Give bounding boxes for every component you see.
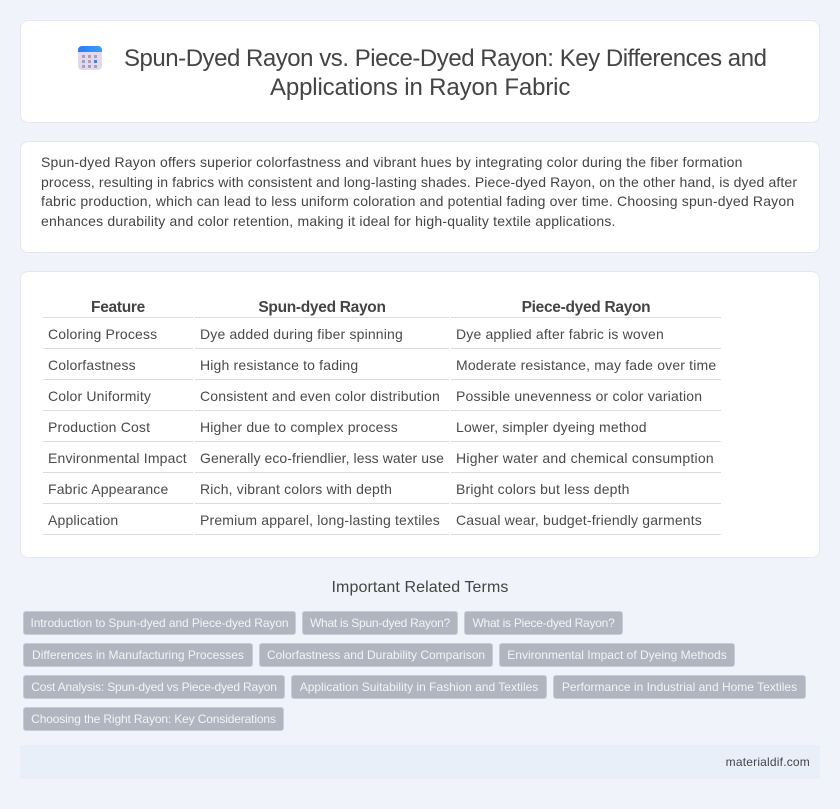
panel: description <box>20 141 820 253</box>
row: Coloring Process: Coloring Process <box>48 326 157 342</box>
row: Application: Casual wear, budget-friendly garments <box>456 512 702 528</box>
row: Coloring Process: Dye applied after fabric is woven <box>456 326 664 342</box>
tag: What is Spun-dyed Rayon? <box>310 616 450 630</box>
row: Application: Application <box>48 512 118 528</box>
row: Production Cost <box>48 419 647 435</box>
row: Color Uniformity: Consistent and even color distribution <box>200 388 440 404</box>
text block: description: enhances durability and color retention, making it ideal for high-quality textile applications. <box>41 213 616 229</box>
tag <box>23 707 284 731</box>
tag: Cost Analysis: Spun-dyed vs Piece-dyed Rayon <box>31 680 277 694</box>
panel: title header <box>20 20 820 123</box>
row: Color Uniformity: Color Uniformity <box>48 388 151 404</box>
tag <box>302 611 458 635</box>
tag: Performance in Industrial and Home Textiles <box>562 680 797 694</box>
row: Environmental Impact <box>48 450 714 466</box>
row: Colorfastness: Colorfastness <box>48 357 136 373</box>
tag <box>23 643 253 667</box>
row: Environmental Impact: Generally eco-friendlier, less water use <box>200 450 444 466</box>
tag: Differences in Manufacturing Processes <box>32 648 244 662</box>
row: Color Uniformity <box>48 388 702 404</box>
tag <box>23 675 285 699</box>
row: Production Cost: Higher due to complex process <box>200 419 398 435</box>
text block: description: fabric production, which can lead to less uniform coloration and potential fading over time. Choosing spun-dyed Rayon <box>41 193 794 209</box>
row: Environmental Impact: Environmental Impact <box>48 450 187 466</box>
row: Colorfastness: Moderate resistance, may fade over time <box>456 357 716 373</box>
tag: Application Suitability in Fashion and Textiles <box>300 680 538 694</box>
icon: calendar <box>78 46 102 70</box>
panel: comparison table <box>20 271 820 558</box>
text block: description <box>41 154 797 229</box>
row: Production Cost: Lower, simpler dyeing method <box>456 419 647 435</box>
title: Applications in Rayon Fabric <box>270 74 570 101</box>
title <box>124 45 766 101</box>
table header: Spun-dyed Rayon: Spun-dyed Rayon <box>258 299 386 316</box>
row: Fabric Appearance: Fabric Appearance <box>48 481 168 497</box>
tag <box>464 611 623 635</box>
tag: Environmental Impact of Dyeing Methods <box>507 648 727 662</box>
row: Application: Premium apparel, long-lasting textiles <box>200 512 440 528</box>
row: Color Uniformity: Possible unevenness or color variation <box>456 388 702 404</box>
row: Colorfastness: High resistance to fading <box>200 357 358 373</box>
tag <box>23 611 296 635</box>
row: Application <box>48 512 702 528</box>
text block: description: process, resulting in fabrics with consistent and long-lasting shades. Piece-dyed Rayon, on the other hand, is dyed after <box>41 174 797 190</box>
tag: Introduction to Spun-dyed and Piece-dyed Rayon <box>30 616 289 630</box>
row: Fabric Appearance: Bright colors but less depth <box>456 481 630 497</box>
tag: Colorfastness and Durability Comparison <box>267 648 485 662</box>
tag: What is Piece-dyed Rayon? <box>472 616 615 630</box>
row: Environmental Impact: Higher water and chemical consumption <box>456 450 714 466</box>
tag: Choosing the Right Rayon: Key Considerations <box>31 712 276 726</box>
row: Colorfastness <box>48 357 716 373</box>
heading: related terms: Important Related Terms <box>332 579 508 596</box>
table header: Piece-dyed Rayon: Piece-dyed Rayon <box>522 299 650 316</box>
footer source text: materialdif.com <box>726 755 810 769</box>
row: Production Cost: Production Cost <box>48 419 150 435</box>
tag <box>553 675 806 699</box>
tag <box>259 643 493 667</box>
tag <box>499 643 735 667</box>
text block: description: Spun-dyed Rayon offers superior colorfastness and vibrant hues by integrating color during the fiber formation <box>41 154 743 170</box>
title: Spun-Dyed Rayon vs. Piece-Dyed Rayon: Key Differences and <box>124 45 766 72</box>
row: Coloring Process <box>48 326 664 342</box>
row: Fabric Appearance: Rich, vibrant colors with depth <box>200 481 392 497</box>
table header: Feature: Feature <box>91 299 145 316</box>
tag <box>291 675 547 699</box>
row: Fabric Appearance <box>48 481 630 497</box>
footer bar <box>20 745 820 779</box>
row: Coloring Process: Dye added during fiber spinning <box>200 326 403 342</box>
